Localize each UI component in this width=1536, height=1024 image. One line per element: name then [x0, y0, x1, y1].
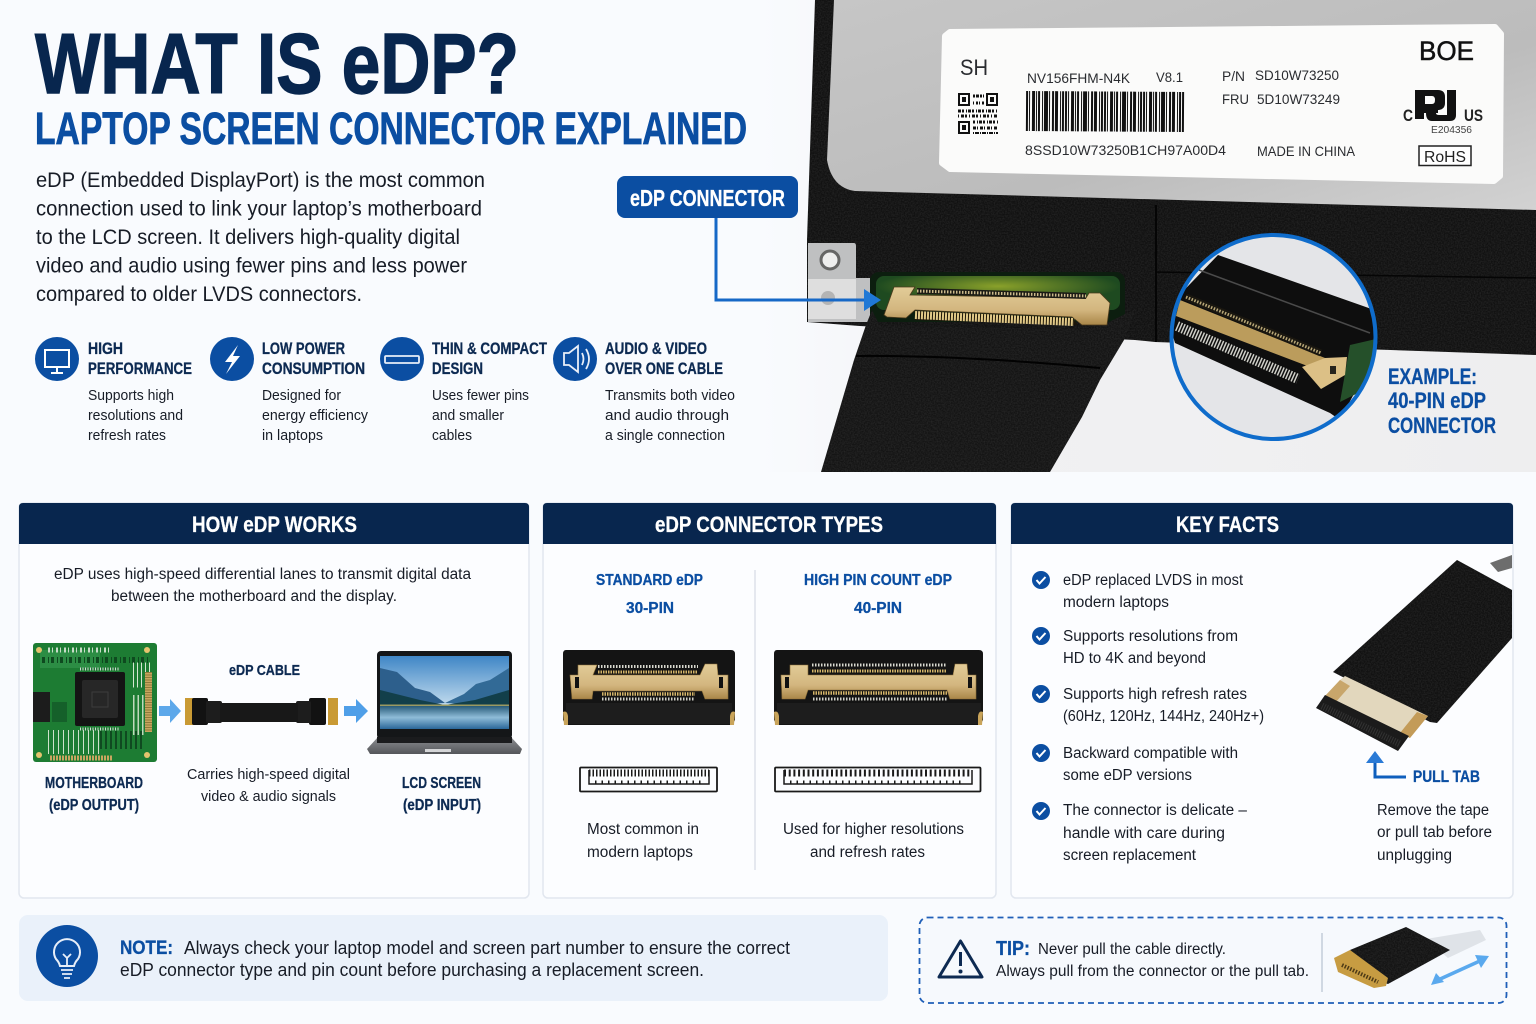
feature: high performance: PERFORMANCE: [88, 360, 192, 378]
heading: how eDP works: HOW eDP WORKS: [192, 512, 357, 537]
feature: low power: in laptops: [262, 428, 323, 444]
UL mark: US: [1464, 106, 1483, 125]
feature: thin and compact: DESIGN: [432, 360, 483, 378]
fact: backward compatible: [1032, 744, 1238, 784]
icon: lightning bolt: [210, 337, 254, 381]
fact: delicate connector: [1032, 802, 1247, 864]
icon: light bulb: [36, 925, 98, 987]
UL mark: C: [1403, 106, 1413, 125]
arrow: motherboard to cable: [159, 699, 181, 723]
motherboard label: MOTHERBOARD: [45, 775, 143, 792]
intro paragraph: eDP (Embedded DisplayPort) is the most common: [36, 168, 485, 192]
subtitle: LAPTOP SCREEN CONNECTOR EXPLAINED: [35, 103, 747, 154]
eDP cable label: eDP CABLE: [229, 662, 300, 679]
arrow: cable to screen: [344, 699, 368, 723]
heading: key facts: KEY FACTS: [1176, 512, 1279, 537]
description text: between the motherboard and the display.: [111, 588, 397, 605]
panel: eDP connector types: [543, 503, 996, 898]
image: cable with pull tab: [1316, 555, 1512, 751]
column: high pin count eDP: [774, 572, 983, 861]
tip box: Always pull from the connector or the pull tab.: [996, 963, 1309, 980]
fact: backward compatible: some eDP versions: [1063, 767, 1192, 784]
column: high pin count eDP: 40-PIN: [854, 600, 902, 617]
connector socket: [870, 272, 1125, 322]
silver panel label: SH: [960, 55, 988, 80]
silver panel label: SD10W73250: [1255, 67, 1339, 83]
feature: low power: energy efficiency: [262, 408, 369, 424]
title: WHAT IS eDP?: [35, 17, 519, 112]
silver panel label: [942, 27, 1501, 181]
motherboard label: (eDP OUTPUT): [49, 797, 139, 814]
arrow: double headed: [1431, 955, 1489, 985]
heading: key facts: [1011, 503, 1513, 544]
panel: connector photo: [760, 0, 1536, 472]
feature: thin and compact: THIN & COMPACT: [432, 340, 547, 358]
RoHS mark: RoHS: [1424, 149, 1466, 166]
feature: low power: Designed for: [262, 388, 341, 404]
fact: resolutions: [1032, 627, 1238, 667]
column: high pin count eDP: Used for higher resolutions: [783, 821, 964, 838]
motherboard label: [45, 775, 143, 814]
silver panel label: NV156FHM-N4K: [1027, 70, 1131, 86]
feature: audio and video: AUDIO & VIDEO: [605, 340, 707, 358]
column: high pin count eDP: HIGH PIN COUNT eDP: [804, 572, 952, 589]
image: tip cable: [1334, 927, 1486, 988]
silver panel label: MADE IN CHINA: [1257, 143, 1356, 159]
RoHS mark: [1419, 146, 1471, 166]
note box: NOTE:: [120, 938, 173, 959]
diagram: 40-pin outline: [775, 768, 980, 792]
intro paragraph: [36, 168, 485, 306]
heading: connector types: [543, 503, 996, 544]
example caption: 40-PIN eDP: [1388, 388, 1486, 413]
heading: connector types: eDP CONNECTOR TYPES: [655, 512, 883, 537]
description text: eDP uses high-speed differential lanes to transmit digital data: [54, 566, 471, 583]
fact: delicate connector: handle with care during: [1063, 825, 1225, 842]
UL mark: [1403, 90, 1483, 136]
fact: delicate connector: screen replacement: [1063, 847, 1197, 864]
cable caption: Carries high-speed digital: [187, 766, 350, 783]
UL mark: E204356: [1431, 125, 1472, 136]
feature: high performance: resolutions and: [88, 408, 183, 424]
feature: high performance: HIGH: [88, 340, 123, 358]
image: eDP cable: [185, 698, 338, 725]
feature: audio and video: Transmits both video: [605, 388, 735, 404]
tip box: Never pull the cable directly.: [1038, 941, 1226, 958]
cable: [821, 308, 1137, 472]
pull tab callout: PULL TAB: [1413, 768, 1480, 786]
image: motherboard: [33, 643, 157, 762]
intro paragraph: compared to older LVDS connectors.: [36, 282, 362, 306]
silver panel label: V8.1: [1156, 69, 1183, 85]
pull tab text: [1377, 802, 1492, 864]
panel: how eDP works: [19, 503, 529, 898]
column: standard eDP: [563, 572, 735, 861]
note box: [19, 915, 888, 1001]
fact: resolutions: Supports resolutions from: [1063, 628, 1238, 645]
icon: warning triangle: [939, 941, 982, 977]
feature: thin and compact: Uses fewer pins: [432, 388, 529, 404]
silver panel label: 8SSD10W73250B1CH97A00D4: [1025, 142, 1226, 158]
feature: audio and video: a single connection: [605, 428, 725, 444]
note box: eDP connector type and pin count before purchasing a replacement screen.: [120, 960, 704, 980]
magnified circle: [1174, 237, 1374, 437]
cable caption: [187, 766, 350, 805]
bracket: [808, 243, 870, 322]
QR code: [958, 94, 998, 133]
gold connector: [884, 287, 1110, 325]
LCD screen label: [402, 775, 481, 814]
panel: key facts: [1011, 503, 1513, 898]
note box: Always check your laptop model and screen part number to ensure the correct: [184, 938, 790, 958]
callout: eDP connector: eDP CONNECTOR: [630, 185, 785, 211]
icon: slim connector: [380, 337, 424, 381]
heading: how eDP works: [19, 503, 529, 544]
feature: thin and compact: and smaller: [432, 408, 504, 424]
LCD screen label: LCD SCREEN: [402, 775, 481, 792]
fact: replaced LVDS: modern laptops: [1063, 594, 1169, 611]
pull tab text: or pull tab before: [1377, 824, 1492, 841]
icon: speaker: [553, 337, 597, 381]
feature: low power: CONSUMPTION: [262, 360, 365, 378]
pull tab callout: [1366, 751, 1480, 786]
column: standard eDP: modern laptops: [587, 844, 693, 861]
tip box: TIP:: [996, 938, 1030, 960]
image: 40-pin connector: [774, 650, 983, 725]
silver panel label: FRU: [1222, 91, 1249, 107]
diagram: 30-pin outline: [580, 768, 717, 792]
intro paragraph: connection used to link your laptop’s motherboard: [36, 196, 482, 220]
callout: eDP connector: [617, 176, 798, 218]
feature: high performance: refresh rates: [88, 428, 166, 444]
pull tab text: unplugging: [1377, 847, 1452, 864]
example caption: [1388, 364, 1496, 438]
arrow: callout to connector: [716, 218, 881, 311]
example caption: CONNECTOR: [1388, 413, 1496, 438]
column: high pin count eDP: and refresh rates: [810, 844, 925, 861]
feature: low power: LOW POWER: [262, 340, 345, 358]
cable caption: video & audio signals: [201, 788, 336, 805]
fact: backward compatible: Backward compatible with: [1063, 745, 1238, 762]
tip box: [920, 918, 1506, 1003]
example caption: EXAMPLE:: [1388, 364, 1477, 389]
silver panel label: BOE: [1419, 36, 1474, 66]
fact: refresh rates: Supports high refresh rates: [1063, 686, 1247, 703]
silver panel label: P/N: [1222, 68, 1245, 84]
silver panel label: 5D10W73249: [1257, 91, 1340, 107]
column: standard eDP: 30-PIN: [626, 600, 674, 617]
fact: refresh rates: (60Hz, 120Hz, 144Hz, 240Hz+): [1063, 708, 1264, 725]
feature: audio and video: OVER ONE CABLE: [605, 360, 723, 378]
feature: audio and video: [553, 337, 735, 444]
image: 30-pin connector: [563, 650, 735, 725]
intro paragraph: to the LCD screen. It delivers high-quality digital: [36, 225, 460, 249]
fact: replaced LVDS: [1032, 571, 1244, 611]
fact: delicate connector: The connector is delicate –: [1063, 802, 1247, 819]
fact: resolutions: HD to 4K and beyond: [1063, 650, 1206, 667]
feature: audio and video: and audio through: [605, 408, 729, 424]
LCD screen label: (eDP INPUT): [403, 797, 481, 814]
icon: monitor: [35, 337, 79, 381]
column: standard eDP: Most common in: [587, 821, 699, 838]
intro paragraph: video and audio using fewer pins and less power: [36, 254, 467, 278]
pull tab text: Remove the tape: [1377, 802, 1489, 819]
feature: thin and compact: [380, 337, 547, 444]
feature: high performance: [35, 337, 192, 444]
image: laptop: [367, 651, 522, 754]
feature: high performance: Supports high: [88, 388, 174, 404]
column: standard eDP: STANDARD eDP: [596, 572, 703, 589]
description text: [54, 566, 471, 605]
feature: thin and compact: cables: [432, 428, 472, 444]
fact: replaced LVDS: eDP replaced LVDS in most: [1063, 572, 1244, 589]
fact: refresh rates: [1032, 685, 1264, 725]
feature: low power: [210, 337, 369, 444]
